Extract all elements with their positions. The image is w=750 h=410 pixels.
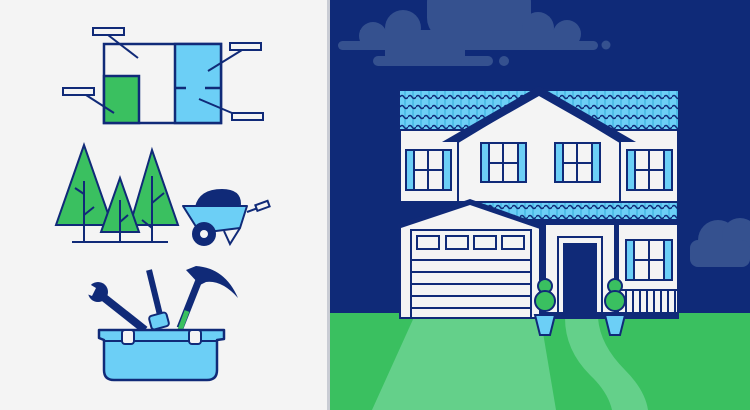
- right lower section: [540, 220, 678, 318]
- roof tiles: [399, 90, 679, 130]
- topiary plants: [535, 279, 625, 335]
- right window: [626, 240, 672, 280]
- right panel: night sky: [330, 0, 750, 410]
- front door: [558, 237, 602, 318]
- gable: [458, 93, 620, 202]
- icon: trees: [56, 145, 178, 242]
- garage: [400, 203, 540, 318]
- house: [398, 86, 679, 335]
- icon: toolbox: [82, 266, 238, 380]
- cloud right: [690, 218, 750, 267]
- middle tile band: [480, 202, 678, 220]
- icon: floor plan: [63, 28, 263, 123]
- upper walls: [400, 130, 678, 202]
- railing: [619, 290, 678, 312]
- icon: wheelbarrow: [183, 190, 270, 245]
- left panel background: [0, 0, 328, 410]
- grass: [330, 313, 750, 410]
- cloud top: [338, 0, 610, 66]
- upper windows: [406, 143, 672, 190]
- light path: [372, 315, 556, 410]
